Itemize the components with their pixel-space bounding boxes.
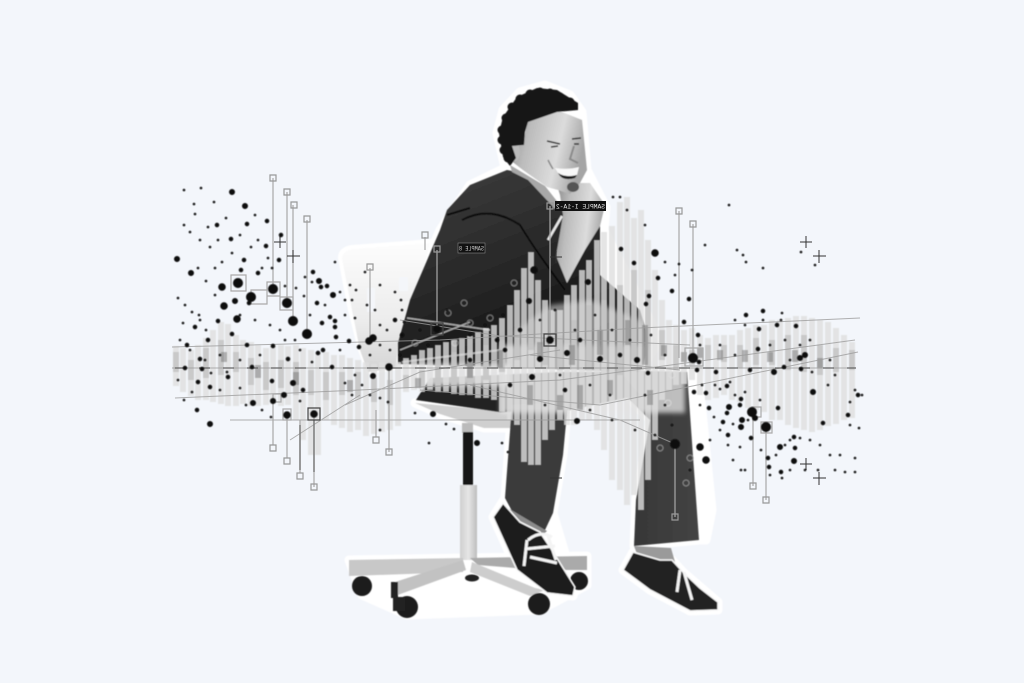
goatee <box>567 182 579 192</box>
whitened glow across the middle <box>400 300 685 413</box>
nose shadow <box>570 146 578 163</box>
hair <box>499 88 578 166</box>
chair wheels <box>352 576 372 596</box>
jeans front leg <box>505 402 568 530</box>
label: SAMPLE 8 mirrored <box>458 243 485 253</box>
shirt ring marks <box>412 280 517 346</box>
shoe laces back <box>677 570 692 600</box>
light columns <box>176 197 852 510</box>
jean ring marks <box>657 372 693 486</box>
chair seat <box>415 403 514 428</box>
eyes and brows <box>547 138 581 147</box>
label: SAMPLE 8 mirrored: SAMPLE 8 <box>459 246 484 252</box>
shirt sleeve seam <box>447 208 565 290</box>
largest particles <box>238 283 766 444</box>
chair post <box>462 423 473 433</box>
chair base arms <box>349 558 463 576</box>
black particles <box>177 188 862 478</box>
dark central blocks <box>224 320 820 410</box>
jeans back leg <box>600 370 699 546</box>
upper left markers <box>273 178 693 358</box>
jeans thigh <box>416 372 640 412</box>
shoe laces front <box>524 534 557 566</box>
chair <box>342 243 588 618</box>
bars: grey data column chart <box>176 197 852 510</box>
face <box>510 110 587 194</box>
large particles <box>222 253 706 460</box>
thin connector lines <box>172 318 860 444</box>
medium particles <box>177 192 813 461</box>
label: SAMPLE I-1A-2 mirrored <box>555 201 606 211</box>
neck <box>510 165 560 210</box>
crosshair plus markers <box>274 236 826 485</box>
small particles <box>185 221 858 472</box>
mouth <box>555 167 579 176</box>
shirt <box>398 170 650 372</box>
label: SAMPLE I-1A-2 mirrored: SAMPLE I-1A-2 <box>556 204 605 210</box>
ankle <box>503 505 547 542</box>
chair back slots <box>367 277 408 312</box>
shoe front <box>493 503 575 596</box>
ear <box>510 143 520 161</box>
white cut-out halo around figure <box>340 85 718 615</box>
man <box>398 88 718 611</box>
shoe back <box>623 552 718 611</box>
dashed horizontal axis <box>175 367 856 369</box>
shirt reflections <box>400 318 500 362</box>
marker boxes <box>270 175 769 520</box>
collar stripe <box>548 216 562 240</box>
marker stems and boxes <box>231 175 772 520</box>
tiny particles <box>178 188 862 478</box>
lower markers <box>273 367 766 517</box>
chair back <box>342 243 430 372</box>
forearm and hand <box>556 183 605 283</box>
mid grey blocks <box>176 270 852 405</box>
